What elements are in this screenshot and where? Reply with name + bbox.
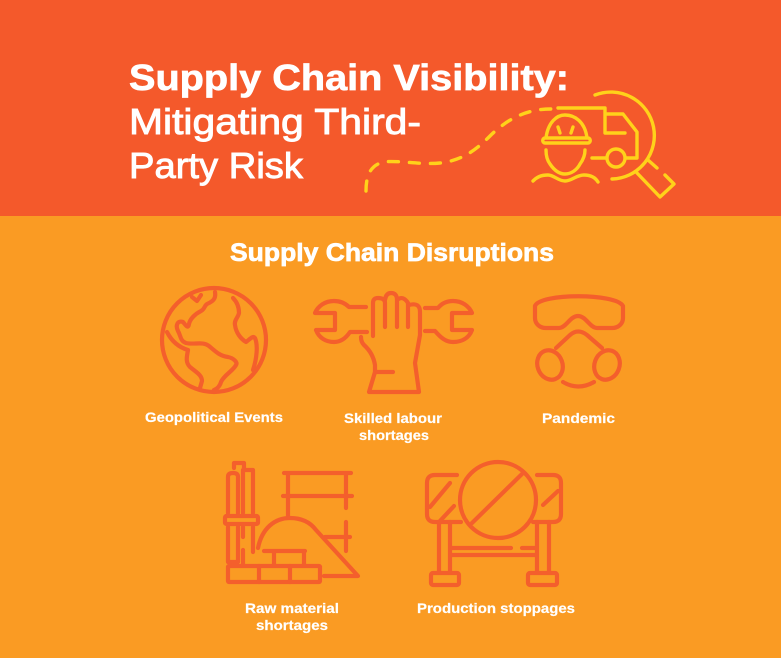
magnifier handle — [637, 160, 674, 197]
truck body — [558, 108, 637, 158]
title: Supply Chain Visibility: — [129, 57, 569, 98]
icon: production stop barrier — [427, 462, 561, 585]
icon: raw materials — [225, 463, 358, 582]
label: skilled labour shortages — [344, 410, 443, 443]
label: geopolitical events: Geopolitical Events — [145, 409, 283, 425]
label: raw material shortages: Raw material — [245, 600, 339, 616]
label: skilled labour shortages: Skilled labour — [344, 410, 443, 426]
panel: orange page background — [0, 216, 781, 658]
title — [129, 57, 569, 186]
label: pandemic: Pandemic — [542, 410, 615, 426]
truck chassis — [592, 156, 606, 160]
heading: supply chain disruptions: Supply Chain Disruptions — [230, 239, 554, 267]
worker face — [546, 150, 585, 174]
label: skilled labour shortages: shortages — [359, 427, 429, 443]
worker helmet — [543, 115, 590, 143]
label: raw material shortages — [245, 600, 339, 633]
icon: globe — [162, 288, 266, 392]
title: Mitigating Third- — [129, 101, 421, 142]
title: Party Risk — [129, 145, 304, 186]
icon: goggles and respirator — [533, 296, 624, 386]
label: production stoppages: Production stoppages — [417, 600, 575, 616]
dashed route line — [366, 109, 551, 191]
icon: worker, truck and magnifier — [533, 92, 674, 197]
icon: wrench and glove — [315, 293, 472, 392]
label: raw material shortages: shortages — [256, 617, 328, 633]
truck wheel — [607, 149, 625, 167]
magnifier lens — [595, 92, 654, 179]
panel: header band — [0, 0, 781, 216]
worker shoulders — [533, 175, 598, 182]
